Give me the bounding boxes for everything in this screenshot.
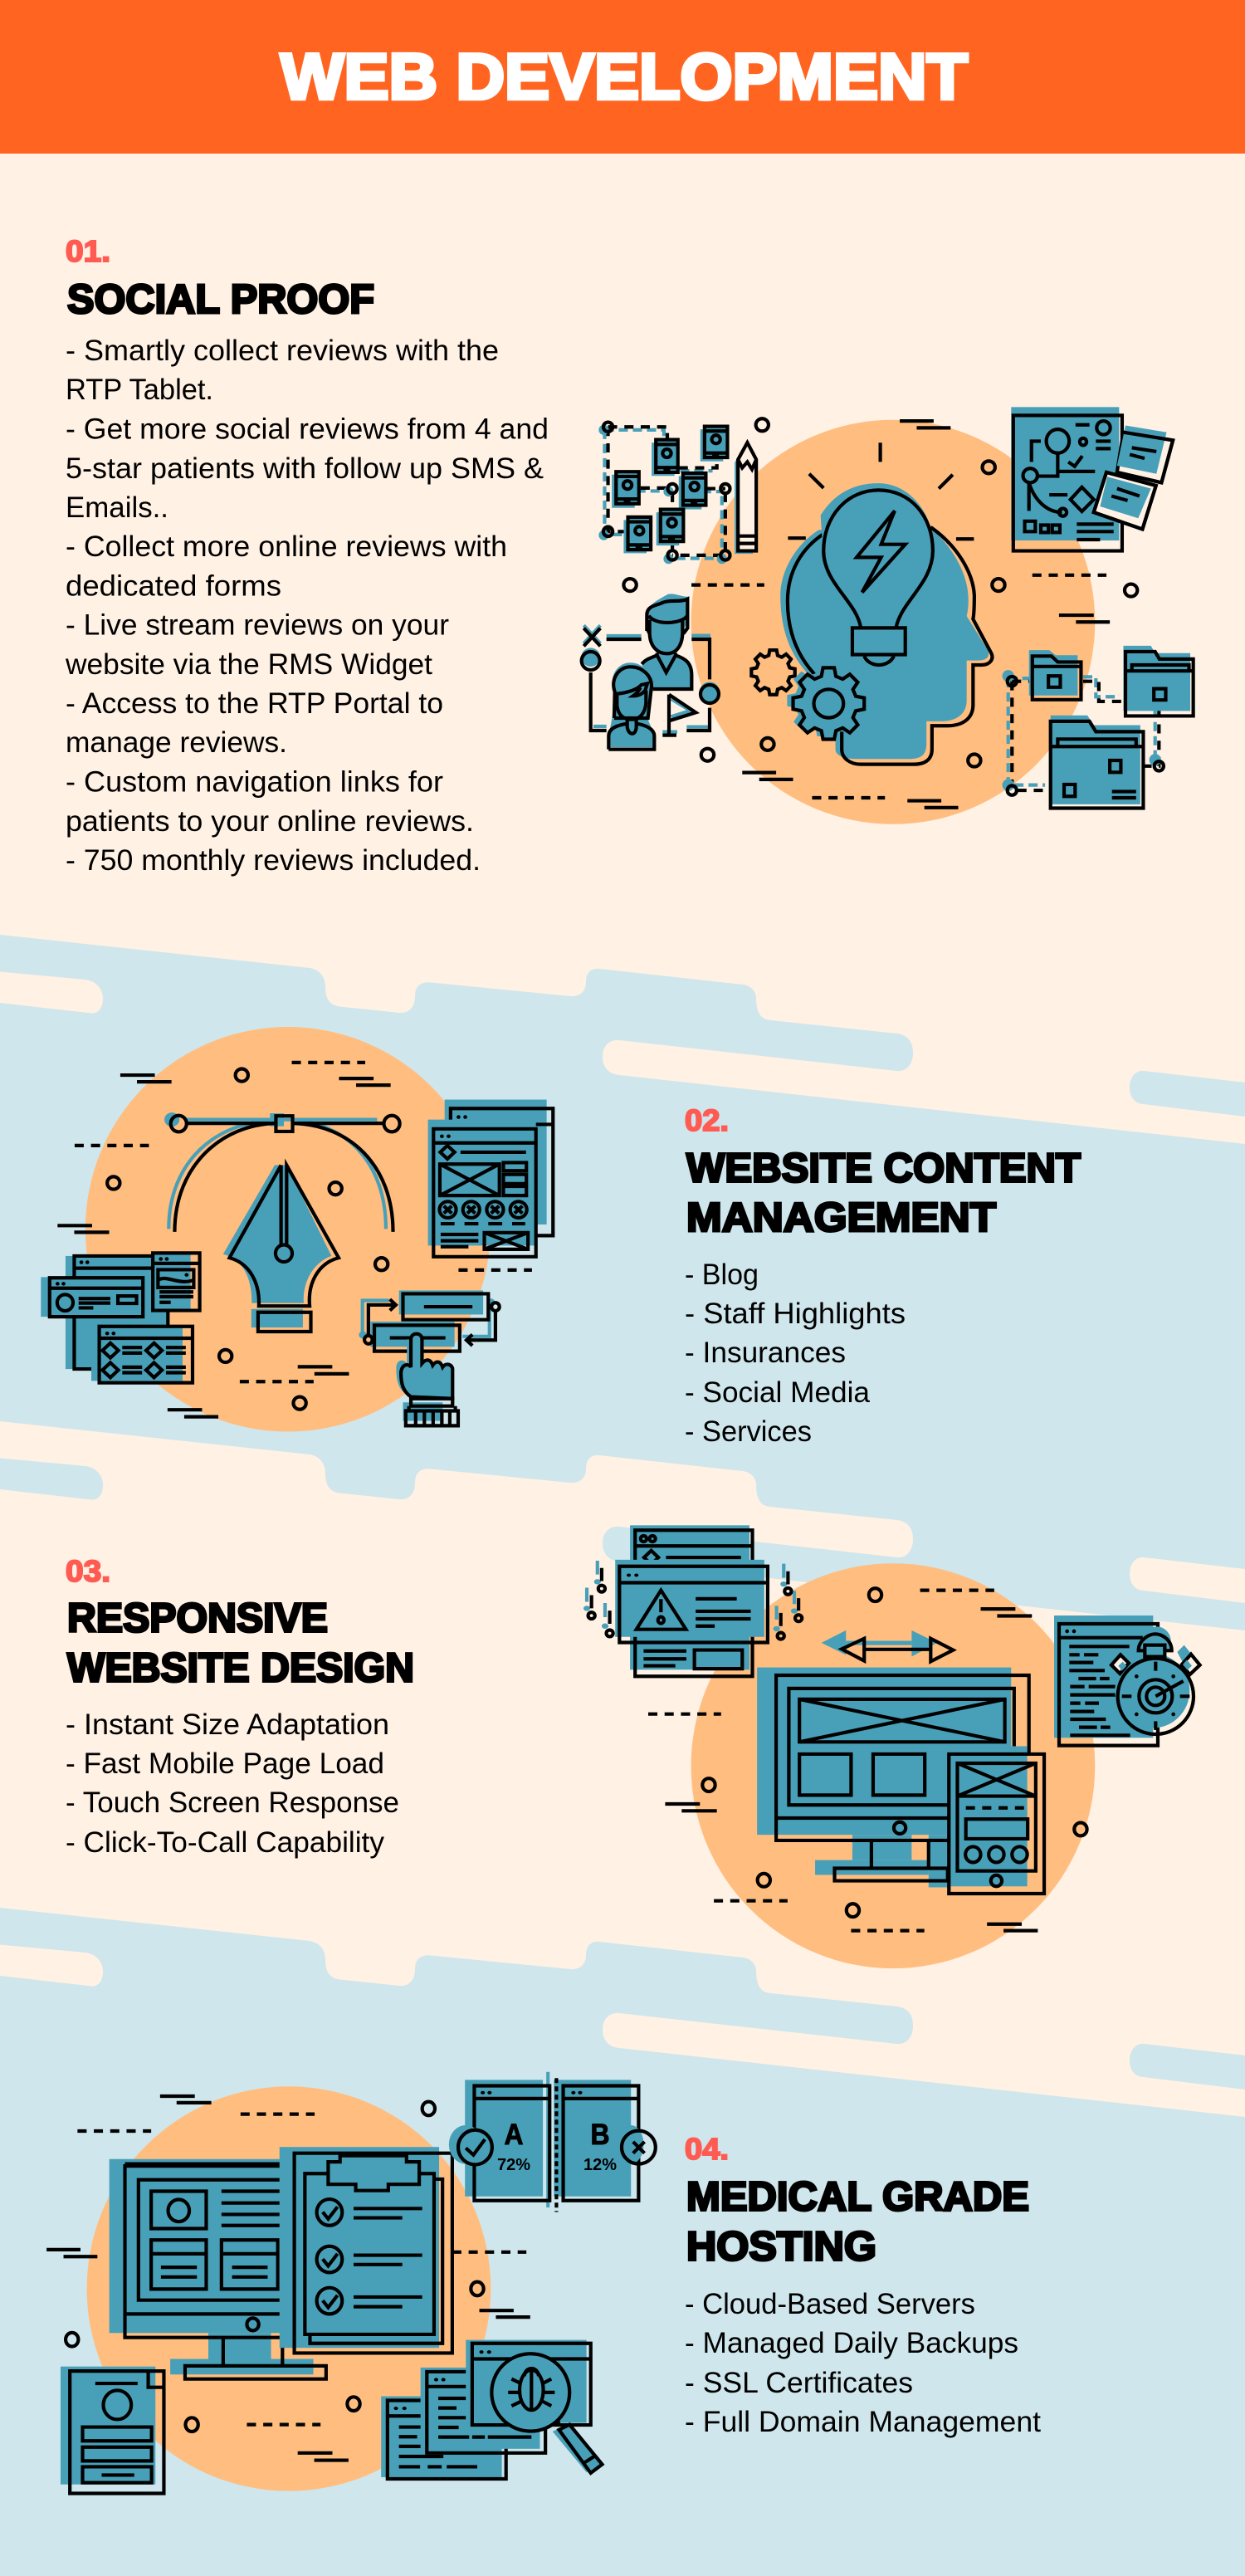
- orange circle backdrop: [87, 2086, 491, 2491]
- text label: B 12%: [583, 2119, 617, 2174]
- illustration: responsive devices: [583, 1525, 1095, 1968]
- illustration: hosting dashboard: [46, 2072, 656, 2494]
- text block: social proof list: - Smartly collect reviews with the: [66, 335, 499, 367]
- decorative rings and dashes: [57, 1063, 532, 1417]
- icon: gears: [751, 650, 864, 739]
- orange circle backdrop: [691, 1563, 1095, 1968]
- icon: pencil: [735, 442, 756, 554]
- decorative small rings and dashes: [623, 418, 1137, 808]
- orange circle backdrop: [691, 420, 1095, 824]
- icon: resize arrow: [822, 1630, 953, 1661]
- panel: 04 medical grade hosting text: [685, 2132, 1041, 2438]
- text block: social proof list: - Access to the RTP Portal to: [66, 687, 443, 720]
- text block: social proof list: patients to your online reviews.: [66, 805, 474, 838]
- text block: responsive list: - Click-To-Call Capability: [66, 1826, 384, 1859]
- text label: B 12%: B: [591, 2119, 609, 2151]
- text block: social proof list: [65, 335, 549, 877]
- text block: content list: - Services: [685, 1415, 812, 1448]
- text block: hosting list: - SSL Certificates: [685, 2367, 913, 2399]
- man: [642, 594, 691, 687]
- orange circle backdrop: [85, 1027, 491, 1432]
- text block: responsive list: [66, 1708, 399, 1859]
- text block: content list: - Staff Highlights: [685, 1298, 906, 1330]
- text block: content list: [685, 1259, 906, 1448]
- text block: social proof list: - Get more social reviews from 4 and: [66, 413, 549, 445]
- text block: social proof list: RTP Tablet.: [66, 374, 213, 406]
- text block: social proof list: 5-star patients with follow up SMS &: [66, 452, 544, 485]
- icon: flowchart document: [1011, 407, 1173, 551]
- panel: 01 social proof text: [65, 234, 549, 877]
- woman: [608, 662, 655, 747]
- icon: folders network: [1003, 646, 1194, 809]
- icon: bezier curve: [164, 1112, 400, 1232]
- section number 01: 01.: [66, 234, 110, 268]
- heading: responsive website design: RESPONSIVE: [67, 1596, 328, 1640]
- icon: buttons with arrows and pointing hand: [359, 1290, 500, 1425]
- text block: social proof list: website via the RMS Widget: [65, 648, 432, 681]
- icon: pen nib: [223, 1166, 339, 1332]
- section number 04: 04.: [685, 2132, 729, 2166]
- text block: social proof list: dedicated forms: [66, 569, 281, 603]
- icon: wireframe windows right: [428, 1100, 553, 1257]
- icon: team people: [581, 594, 720, 750]
- text block: social proof list: - Collect more online reviews with: [66, 530, 507, 563]
- icon: head silhouette: [780, 523, 992, 765]
- icon: A/B test windows: [449, 2072, 656, 2212]
- text label: A 72%: 72%: [497, 2156, 530, 2174]
- header banner: [0, 0, 1245, 154]
- text block: social proof list: - Custom navigation links for: [66, 765, 443, 799]
- text block: content list: - Blog: [685, 1259, 759, 1291]
- heading: responsive website design: [67, 1596, 414, 1690]
- icon: desktop monitor: [757, 1668, 1029, 1887]
- heading: medical grade hosting: MEDICAL GRADE: [686, 2175, 1029, 2220]
- text label: B 12%: 12%: [583, 2156, 617, 2174]
- flag: [671, 699, 691, 716]
- heading: medical grade hosting: HOSTING: [686, 2225, 876, 2270]
- title: WEB DEVELOPMENT: [281, 40, 968, 113]
- icon: desktop monitor: [110, 2159, 326, 2379]
- icon: checklist clipboard: [280, 2147, 452, 2353]
- icon: code window with stopwatch: [1054, 1615, 1200, 1746]
- text block: hosting list: - Managed Daily Backups: [685, 2327, 1018, 2359]
- illustration: pen tool: [41, 1027, 553, 1432]
- decorative rings and dashes: [46, 2096, 530, 2461]
- heading: social proof: SOCIAL PROOF: [67, 277, 374, 322]
- background wave bands: [0, 935, 1245, 2576]
- icon: bug search windows: [381, 2340, 603, 2479]
- text block: social proof list: - 750 monthly reviews included.: [66, 844, 481, 877]
- heading: website content management: WEBSITE CONTENT: [686, 1146, 1081, 1190]
- icon: falling exclamation marks: [583, 1561, 802, 1640]
- section number 02: 02.: [685, 1103, 729, 1137]
- text block: social proof list: - Live stream reviews on your: [66, 609, 449, 641]
- text label: A 72%: A: [505, 2119, 523, 2151]
- text block: social proof list: manage reviews.: [66, 726, 287, 759]
- text block: content list: - Social Media: [685, 1376, 871, 1409]
- text block: hosting list: - Cloud-Based Servers: [685, 2288, 975, 2320]
- decorative rings and dashes: [648, 1588, 1087, 1931]
- icon: mobile phone wireframe: [948, 1746, 1044, 1894]
- heading: medical grade hosting: [686, 2175, 1029, 2270]
- text block: responsive list: - Touch Screen Response: [66, 1787, 399, 1819]
- heading: website content management: MANAGEMENT: [686, 1195, 996, 1240]
- heading: website content management: [686, 1146, 1081, 1240]
- illustration: head with lightbulb: [598, 407, 1194, 824]
- text block: social proof list: Emails..: [66, 491, 168, 524]
- heading: responsive website design: WEBSITE DESIGN: [67, 1645, 414, 1690]
- section number 03: 03.: [66, 1554, 110, 1588]
- text block: responsive list: - Instant Size Adaptation: [66, 1708, 389, 1741]
- icon: warning browser window: [615, 1525, 768, 1676]
- icon: profile document: [61, 2367, 164, 2494]
- panel: 03 responsive website design text: [66, 1554, 414, 1859]
- panel: 02 website content management text: [685, 1103, 1081, 1448]
- text block: content list: - Insurances: [685, 1337, 846, 1369]
- icon: lightbulb: [788, 442, 974, 665]
- text block: hosting list: [685, 2288, 1041, 2438]
- icon: browser windows left: [41, 1253, 200, 1383]
- icon: phones network: [598, 423, 730, 564]
- text label: A 72%: [497, 2119, 530, 2174]
- text block: responsive list: - Fast Mobile Page Load: [66, 1747, 384, 1780]
- text block: hosting list: - Full Domain Management: [685, 2406, 1041, 2438]
